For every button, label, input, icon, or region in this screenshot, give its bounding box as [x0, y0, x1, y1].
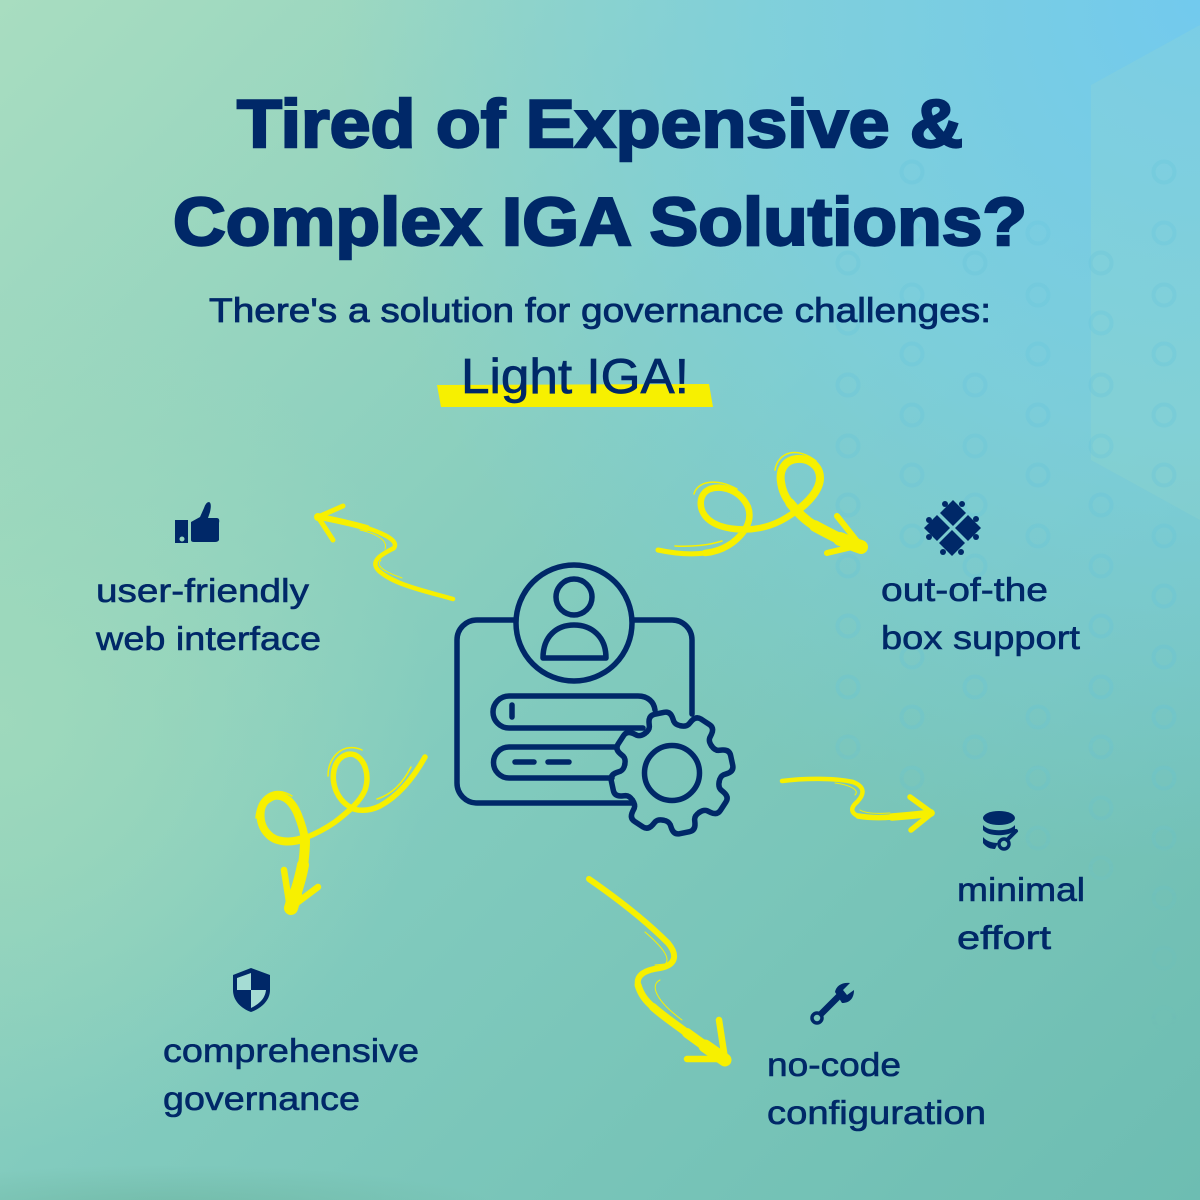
arrow: to out-of-the box support [658, 452, 861, 554]
subtitle: There's a solution for governance challenges: [209, 292, 991, 330]
label: web interface [95, 620, 321, 657]
label: governance [163, 1080, 360, 1117]
feature: minimal effort [957, 811, 1085, 956]
label: box support [881, 619, 1080, 656]
icon: database with key [983, 811, 1016, 849]
icon: puzzle pieces [924, 500, 981, 556]
icon: thumbs up [175, 502, 219, 543]
label [767, 1046, 986, 1131]
arrow: to no-code configuration [589, 879, 725, 1060]
label [881, 571, 1080, 656]
label: effort [957, 919, 1051, 956]
central icon: user profile card with gear [457, 565, 735, 836]
title: Complex IGA Solutions? [173, 184, 1027, 260]
feature: user-friendly web interface [95, 502, 321, 657]
label: no-code [767, 1046, 901, 1083]
arrow: to user-friendly web interface [314, 506, 453, 599]
label: user-friendly [96, 572, 310, 609]
icon: shield [233, 968, 270, 1012]
arrow: to minimal effort [782, 779, 932, 830]
label [957, 871, 1085, 956]
label [95, 572, 321, 657]
title: Tired of Expensive & [237, 86, 963, 162]
feature: comprehensive governance [163, 968, 419, 1117]
feature: out-of-the box support [881, 500, 1080, 656]
highlighted heading: Light IGA: Light IGA! [461, 350, 689, 404]
label: comprehensive [163, 1032, 419, 1069]
label [163, 1032, 419, 1117]
icon: wrench [812, 983, 854, 1023]
label: configuration [767, 1094, 986, 1131]
feature: no-code configuration [767, 983, 986, 1131]
title [173, 86, 1027, 260]
hexagon pattern [1091, 222, 1176, 488]
arrow: to comprehensive governance [256, 748, 425, 908]
label: out-of-the [881, 571, 1048, 608]
label: minimal [957, 871, 1085, 908]
